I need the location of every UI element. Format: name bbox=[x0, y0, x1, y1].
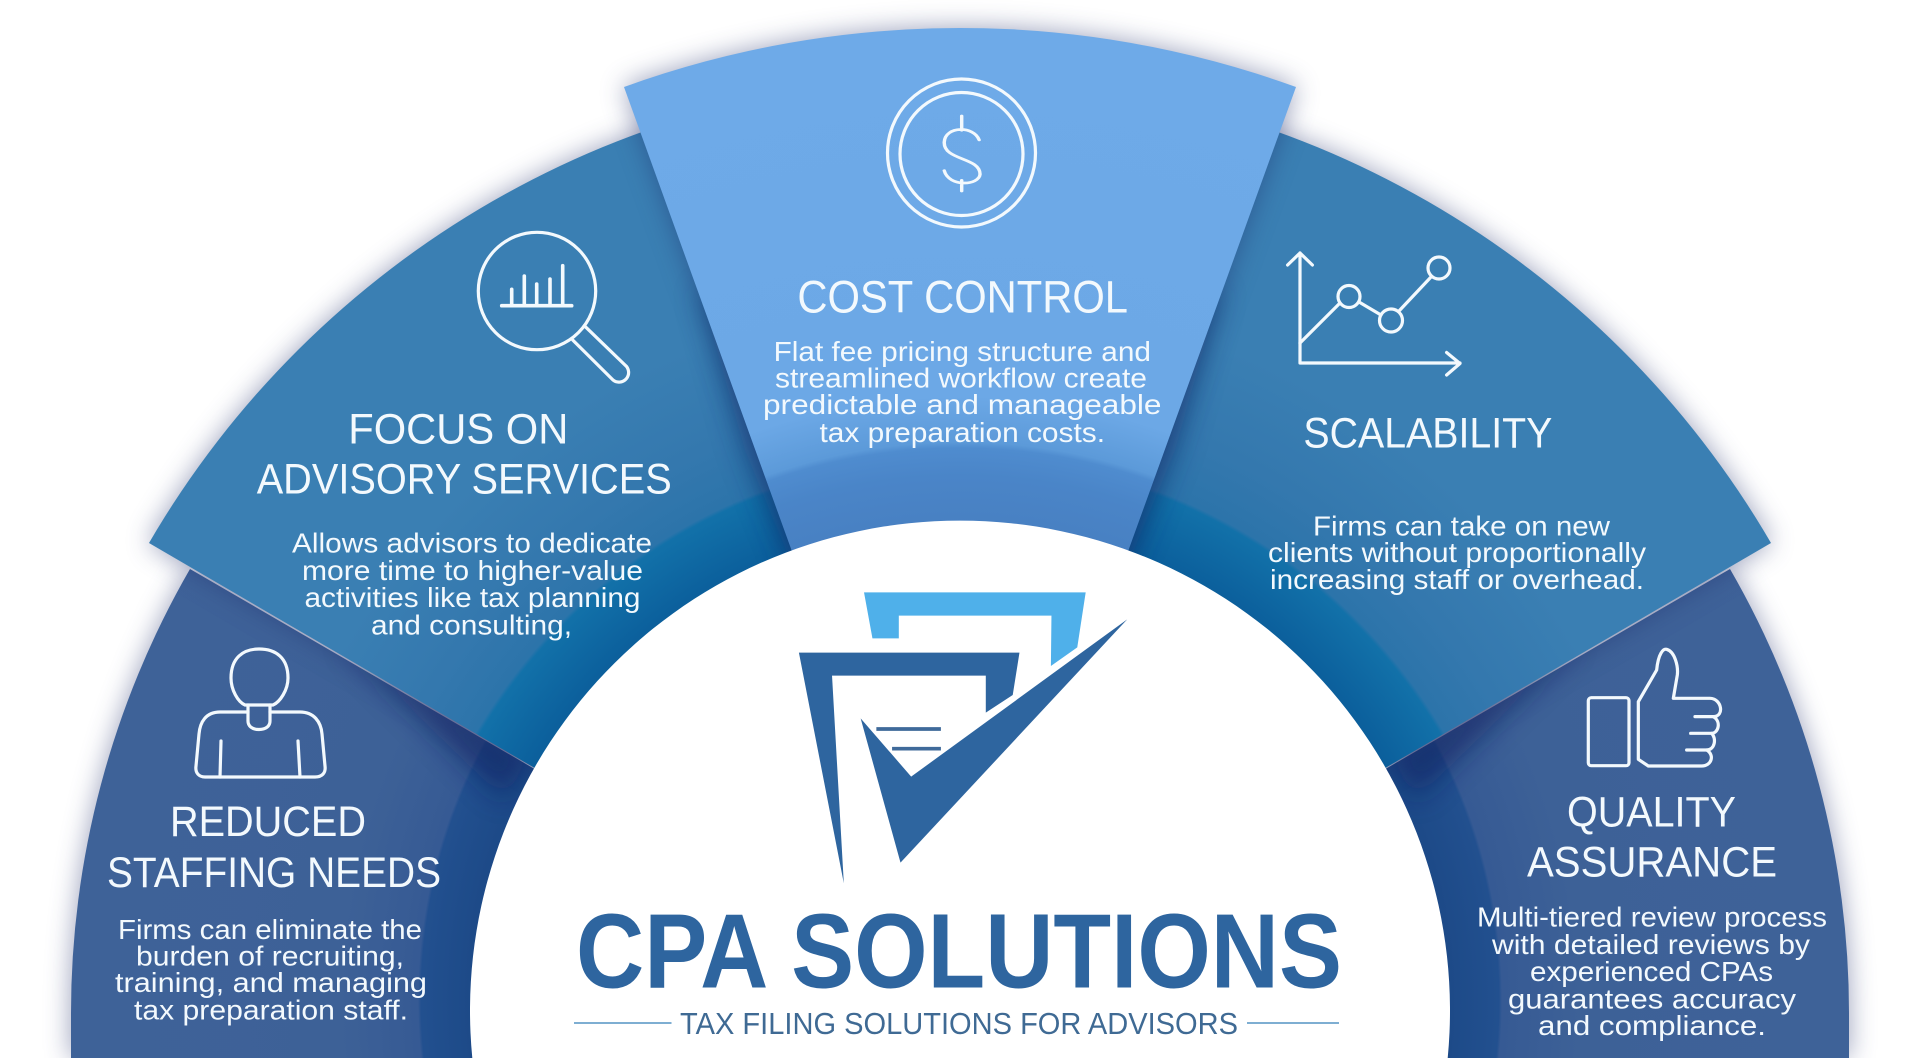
text: quality assurance body: with detailed reviews by bbox=[1491, 929, 1810, 960]
icon: line chart bbox=[1288, 253, 1460, 375]
panel: scalability bbox=[960, 76, 1771, 1016]
brand name: CPA SOLUTIONS bbox=[576, 892, 1342, 1010]
heading: focus on advisory services bbox=[257, 405, 672, 503]
text: scalability body: clients without proportionally bbox=[1268, 537, 1646, 568]
icon: magnifier with bar chart bbox=[478, 232, 629, 382]
text: scalability body: increasing staff or overhead. bbox=[1270, 564, 1644, 595]
text: quality assurance body: and compliance. bbox=[1538, 1010, 1766, 1041]
heading: quality assurance bbox=[1527, 788, 1777, 886]
text: focus body bbox=[292, 528, 652, 640]
panel: reduced staffing needs bbox=[71, 569, 960, 1058]
text: quality assurance body: Multi-tiered review process bbox=[1477, 902, 1827, 932]
text: scalability body bbox=[1268, 510, 1646, 595]
heading: quality assurance: ASSURANCE bbox=[1527, 838, 1777, 886]
text: reduced staffing body: Firms can eliminate the bbox=[118, 914, 422, 945]
text: cost control body: tax preparation costs. bbox=[820, 417, 1105, 448]
text: focus body: and consulting, bbox=[371, 610, 572, 640]
panel: cost control bbox=[624, 28, 1296, 1016]
icon: thumbs up bbox=[1588, 649, 1721, 766]
text: reduced staffing body bbox=[115, 914, 427, 1026]
text: quality assurance body: guarantees accuracy bbox=[1508, 984, 1796, 1014]
text: scalability body: Firms can take on new bbox=[1313, 510, 1611, 541]
icon: document check logo bbox=[799, 592, 1127, 883]
text: reduced staffing body: tax preparation staff. bbox=[134, 994, 408, 1026]
heading: focus on advisory services: FOCUS ON bbox=[348, 405, 568, 453]
text: reduced staffing body: training, and managing bbox=[115, 967, 427, 998]
heading: scalability: SCALABILITY bbox=[1303, 410, 1552, 458]
heading: focus on advisory services: ADVISORY SERVICES bbox=[257, 455, 672, 503]
text: quality assurance body: experienced CPAs bbox=[1530, 956, 1773, 987]
text: cost control body bbox=[763, 336, 1162, 448]
heading: reduced staffing needs: STAFFING NEEDS bbox=[107, 849, 441, 897]
panel: quality assurance bbox=[960, 569, 1849, 1058]
text: cost control body: streamlined workflow create bbox=[775, 362, 1147, 394]
heading: cost control: COST CONTROL bbox=[797, 272, 1128, 322]
panel: center logo bbox=[470, 521, 1450, 1058]
text: cost control body: predictable and manageable bbox=[763, 389, 1162, 420]
text: focus body: activities like tax planning bbox=[304, 582, 640, 613]
panel: focus on advisory services bbox=[149, 76, 960, 1016]
icon: person bbox=[196, 649, 325, 777]
tagline: TAX FILING SOLUTIONS FOR ADVISORS bbox=[680, 1006, 1238, 1041]
heading: reduced staffing needs bbox=[107, 798, 441, 897]
heading: reduced staffing needs: REDUCED bbox=[170, 798, 366, 846]
text: focus body: more time to higher-value bbox=[302, 555, 643, 586]
text: quality assurance body bbox=[1477, 902, 1827, 1041]
icon: dollar coin bbox=[888, 79, 1036, 227]
text: cost control body: Flat fee pricing structure and bbox=[774, 336, 1151, 367]
heading: quality assurance: QUALITY bbox=[1567, 788, 1736, 836]
text: focus body: Allows advisors to dedicate bbox=[292, 528, 652, 559]
text: reduced staffing body: burden of recruiting, bbox=[136, 940, 404, 972]
